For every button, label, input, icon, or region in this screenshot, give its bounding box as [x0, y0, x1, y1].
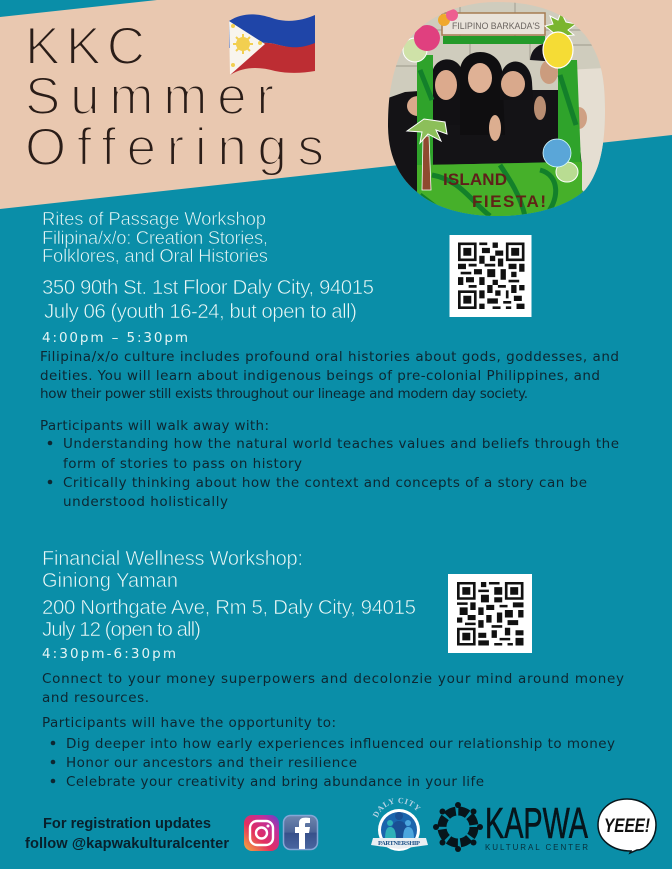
logo: Kapwa Kultural Center: KAPWA [485, 799, 588, 848]
location and date: workshop two [42, 596, 416, 641]
bullet list: workshop two [51, 736, 615, 790]
registration note [25, 816, 229, 852]
location and date: workshop one [42, 276, 374, 323]
frame sign [442, 13, 545, 35]
bullet list: workshop one [48, 436, 619, 510]
heading: workshop two [42, 548, 303, 592]
QR code: workshop one [450, 235, 532, 317]
title: KKC [25, 17, 145, 76]
flowers and leaves [403, 38, 427, 62]
bullet list: workshop one: understood holistically [63, 494, 228, 510]
photo: group in island fiesta frame: FILIPINO BARKADA'S [452, 21, 540, 32]
heading: workshop one [42, 208, 268, 266]
bullet list: workshop two: Dig deeper into how early experiences influenced our relationship to money [66, 736, 615, 752]
logo: Daly City Partnership [371, 798, 428, 851]
diagonal beige banner [0, 0, 672, 209]
frame: green border [417, 55, 600, 216]
bullet list: workshop one: Understanding how the natural world teaches values and beliefs through the [63, 436, 619, 452]
blue hibiscus [556, 162, 578, 182]
photo: group in island fiesta frame [385, 0, 610, 220]
heading: workshop one: Rites of Passage Workshop [42, 208, 266, 229]
logo: Kapwa Kultural Center [433, 799, 588, 852]
icon: Philippine flag [229, 14, 315, 75]
bullet list: workshop one: Critically thinking about how the context and concepts of a story can be [63, 475, 587, 491]
heading: workshop two: Financial Wellness Workshop: [42, 548, 303, 570]
palm tree [422, 136, 431, 190]
person: hands [407, 96, 417, 116]
title: Offerings [25, 118, 324, 177]
logo: Daly City Partnership: DALY CITY [372, 798, 421, 818]
location and date: workshop two: 200 Northgate Ave, Rm 5, Daly City, 94015 [42, 596, 416, 619]
speech bubble: YEEE! [598, 799, 656, 853]
icon: Facebook [284, 816, 318, 850]
logo: Daly City Partnership: PARTNERSHIP [378, 840, 420, 847]
QR code: workshop two [448, 574, 532, 653]
time: workshop two: 4:30pm-6:30pm [42, 646, 176, 662]
description: workshop two: and resources. [42, 690, 149, 706]
speech bubble: YEEE!: YEEE! [604, 816, 650, 837]
description: workshop one: deities. You will learn about indigenous beings of pre-colonial Philippines, and [40, 368, 600, 384]
description: workshop one: Filipina/x/o culture includes profound oral histories about gods, goddesses, and [40, 349, 619, 365]
bullet list: workshop two: Celebrate your creativity and bring abundance in your life [66, 774, 484, 790]
description: workshop one [40, 349, 619, 434]
registration note: For registration updates [43, 816, 211, 832]
person: faces [435, 70, 457, 100]
person: hair [433, 59, 460, 90]
location and date: workshop one: 350 90th St. 1st Floor Daly City, 94015 [42, 276, 374, 299]
heading: workshop two: Giniong Yaman [42, 570, 178, 592]
heading: workshop one: Folklores, and Oral Histories [42, 245, 268, 266]
registration note: follow @kapwakulturalcenter [25, 836, 229, 852]
logo: Kapwa Kultural Center: KULTURAL CENTER [485, 843, 588, 852]
bullet list: workshop two: Honor our ancestors and their resilience [66, 755, 357, 771]
description: workshop one: how their power still exists throughout our lineage and modern day society. [40, 386, 528, 402]
frame text: ISLAND [443, 170, 507, 189]
location and date: workshop one: July 06 (youth 16-24, but open to all) [44, 300, 357, 323]
time: workshop one: 4:00pm – 5:30pm [42, 330, 188, 346]
description: workshop one: Participants will walk away with: [40, 418, 269, 434]
bullet list: workshop one: form of stories to pass on history [63, 456, 302, 472]
description: workshop two: Participants will have the opportunity to: [42, 715, 336, 731]
photo: group in island fiesta frame: FIESTA! [472, 192, 546, 211]
description: workshop two: Connect to your money superpowers and decolonzie your mind around money [42, 671, 624, 687]
person: white shirt [578, 68, 605, 192]
heading: workshop one: Filipina/x/o: Creation Stories, [42, 227, 268, 248]
title: Summer [25, 67, 274, 126]
title [25, 17, 324, 177]
description: workshop two [42, 671, 624, 731]
icon: Instagram [244, 815, 279, 851]
person: dark clothes [388, 90, 582, 194]
pineapple [544, 15, 575, 36]
location and date: workshop two: July 12 (open to all) [42, 618, 201, 641]
